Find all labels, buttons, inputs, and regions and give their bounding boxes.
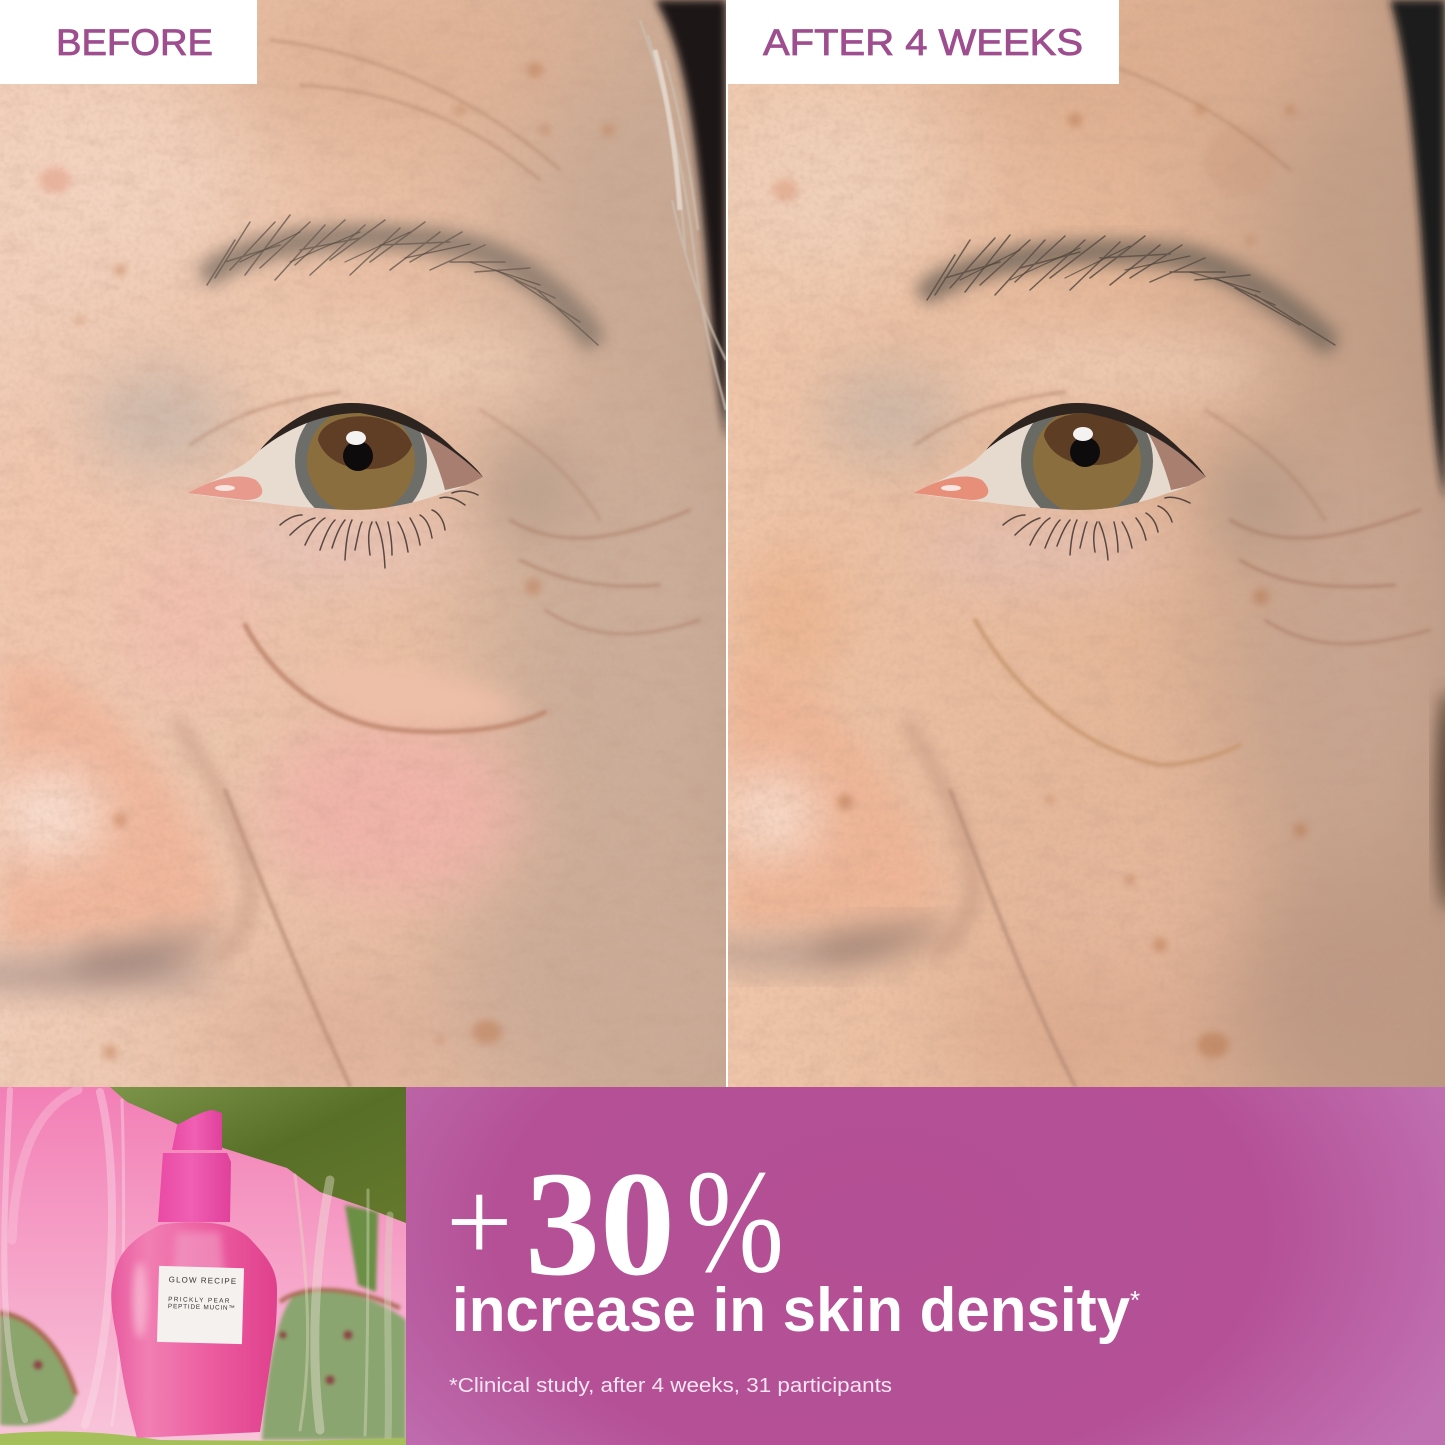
eye socket shadow xyxy=(85,335,570,581)
nose xyxy=(728,660,939,930)
bottle label: PRICKLY PEAR xyxy=(168,1296,231,1305)
photo panel: before xyxy=(0,0,726,1087)
label: after 4 weeks xyxy=(728,0,1119,84)
eyebrow xyxy=(207,215,598,345)
hair: after 4 weeks xyxy=(1390,0,1445,910)
nose underside shadow xyxy=(690,925,955,969)
eye xyxy=(913,395,1216,527)
result panel xyxy=(406,1087,1445,1445)
subheading: increase in skin density xyxy=(452,1276,1130,1345)
lower lashes xyxy=(1003,497,1190,560)
nose highlight xyxy=(720,769,820,861)
forehead tone xyxy=(690,0,1445,1110)
hair: before xyxy=(640,0,726,440)
mole and freckle marks xyxy=(39,62,614,1059)
headline stat: + xyxy=(446,1156,513,1287)
skin texture xyxy=(0,92,168,834)
footnote: *Clinical study, after 4 weeks, 31 participants xyxy=(449,1375,892,1397)
pump collar xyxy=(158,1153,231,1222)
headline stat: 30 xyxy=(525,1141,675,1307)
nose xyxy=(0,660,219,950)
photo panel: after 4 weeks xyxy=(690,0,1445,1110)
asterisk: * xyxy=(1130,1285,1140,1315)
pink cheek xyxy=(166,620,525,889)
skin texture xyxy=(728,0,1445,1087)
nose fold xyxy=(175,720,251,960)
lower lashes xyxy=(280,491,478,568)
nose fold xyxy=(905,720,973,955)
gel strands xyxy=(4,1090,390,1440)
wrinkles and under-eye crease xyxy=(915,40,1430,1086)
pump top xyxy=(172,1110,222,1150)
eyebrow xyxy=(927,235,1335,345)
nose highlight xyxy=(0,767,106,863)
eye socket shadow xyxy=(735,340,1295,695)
product photo xyxy=(0,1087,406,1445)
eye bag and creases xyxy=(338,673,520,724)
bottle xyxy=(111,1222,277,1438)
forehead tone xyxy=(0,0,583,1087)
headline stat xyxy=(446,1140,784,1307)
eye xyxy=(188,403,483,510)
label: after 4 weeks: AFTER 4 WEEKS xyxy=(763,22,1083,63)
bottle label: GLOW RECIPE xyxy=(169,1275,237,1286)
bottle label: PEPTIDE MUCIN™ xyxy=(168,1303,236,1312)
leaf xyxy=(110,1087,406,1223)
headline stat: % xyxy=(686,1140,784,1304)
nose underside shadow xyxy=(0,925,225,991)
cactus pads xyxy=(0,1205,406,1440)
label: before: BEFORE xyxy=(56,22,213,63)
mole and freckle marks xyxy=(772,105,1307,1058)
label: before xyxy=(0,0,257,84)
bottle label xyxy=(157,1266,244,1344)
ground gel xyxy=(0,1432,406,1445)
